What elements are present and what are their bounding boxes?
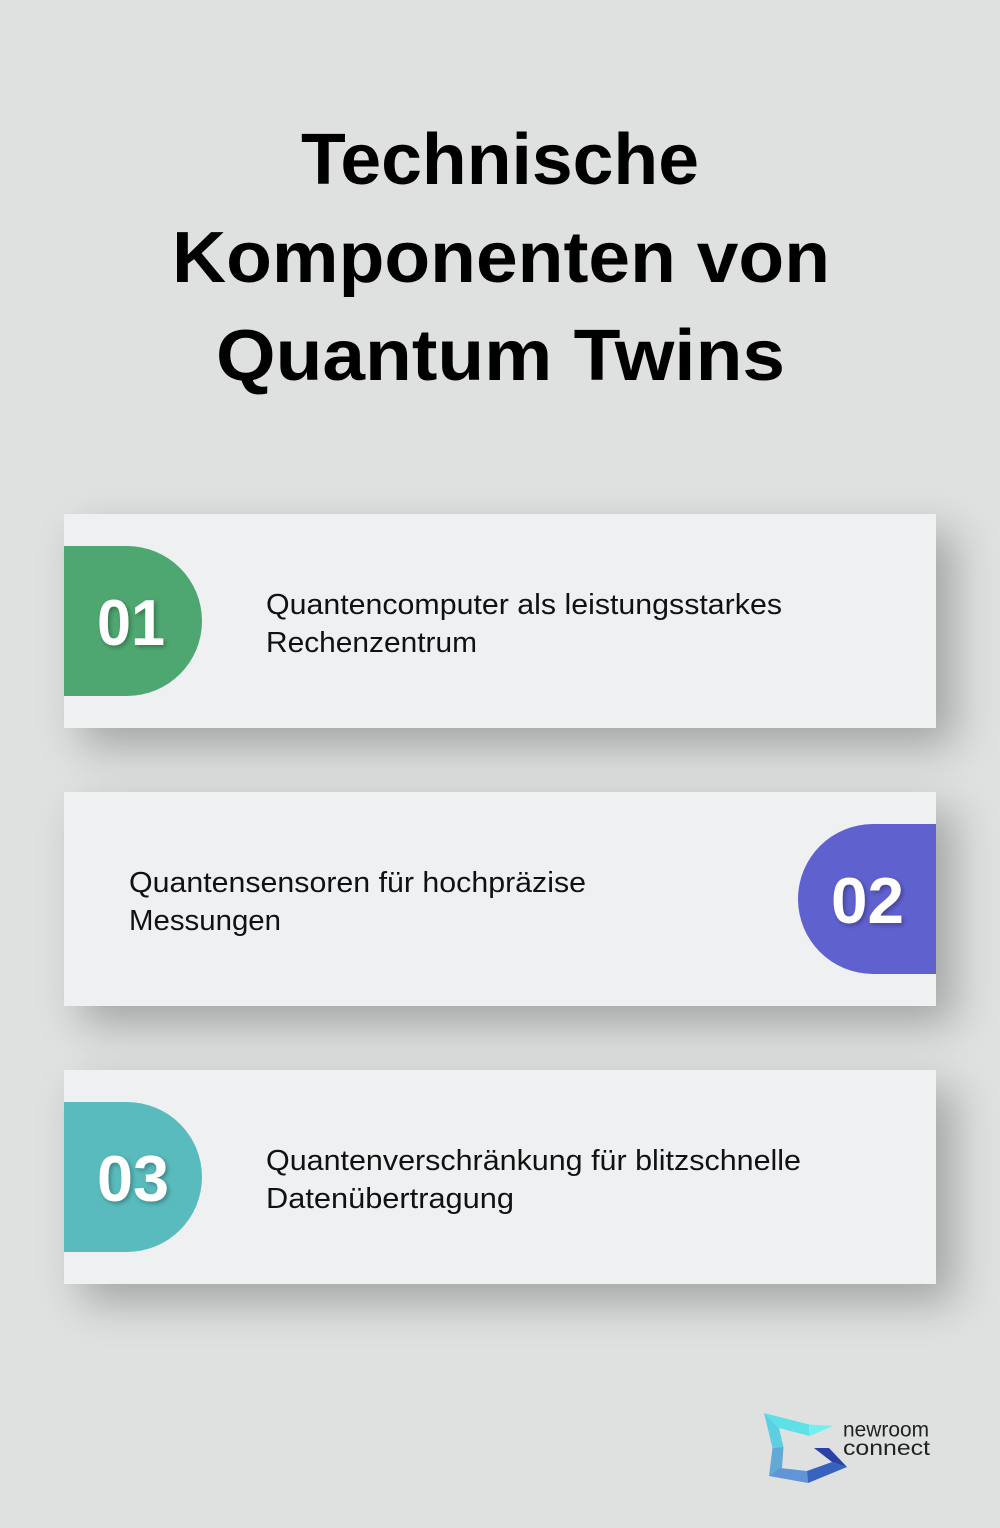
wordmark — [843, 1418, 930, 1460]
badge: 01 — [64, 546, 202, 696]
badge: 03 — [64, 1102, 202, 1252]
title — [172, 120, 830, 396]
panel: step 01 — [64, 514, 936, 728]
icon: logo mark — [764, 1413, 847, 1483]
badge: 02 — [798, 824, 936, 974]
text 03 — [266, 1145, 801, 1215]
text 02 — [129, 867, 586, 937]
panel: step 02 — [64, 792, 936, 1006]
wordmark: newroom — [843, 1418, 929, 1442]
text 03: Quantenverschränkung für blitzschnelle — [266, 1145, 801, 1177]
logo: newroom connect — [764, 1413, 930, 1483]
title: Quantum Twins — [216, 316, 785, 396]
text 02: Messungen — [129, 905, 281, 937]
title: Technische — [301, 120, 699, 200]
text 01: Quantencomputer als leistungsstarkes — [266, 589, 782, 621]
text 02: Quantensensoren für hochpräzise — [129, 867, 586, 899]
number 03: 03 — [97, 1142, 169, 1215]
panel: step 03 — [64, 1070, 936, 1284]
text 01 — [266, 589, 782, 659]
number 01: 01 — [97, 586, 165, 659]
text 01: Rechenzentrum — [266, 627, 477, 659]
text 03: Datenübertragung — [266, 1183, 514, 1215]
number 02: 02 — [831, 864, 904, 937]
title: Komponenten von — [172, 218, 830, 298]
wordmark: connect — [843, 1437, 930, 1460]
